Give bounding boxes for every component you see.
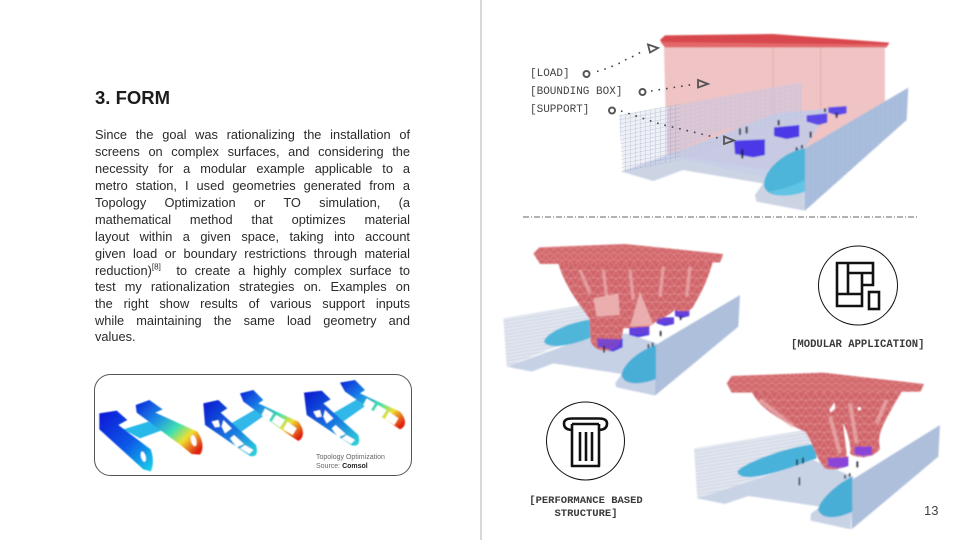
back wall [694,429,810,498]
label: bounding box: [BOUNDING BOX] [530,86,622,98]
body text: given load or boundary restrictions through material [95,246,410,261]
far train [544,319,592,346]
horizontal divider [523,216,918,218]
body text: screens on complex surfaces, and considering the [95,144,410,159]
funnel openings [829,403,835,412]
body text: necessity for a modular example applicable to a [95,161,410,176]
page number: 13 [924,503,938,518]
body text: metro station, I used geometries generated from a [95,178,410,193]
diagram: optimization result one [503,244,740,396]
bounding box volume [664,47,885,170]
body text: Topology Optimization or TO simulation, (a [95,195,410,210]
label: performance based structure: [PERFORMANCE BASED [529,495,643,507]
image caption: Source: Comsol [316,463,368,470]
solid bracket [99,400,203,471]
people [740,108,837,158]
lattice bracket two [304,380,405,446]
left wall grid overlay [619,104,680,172]
faint wall grid continuation [680,82,802,160]
floor [697,460,853,529]
red topology funnel [752,392,902,469]
body text: values. [95,329,136,344]
vertical divider [480,0,482,540]
mesh highlights [760,400,887,453]
body text: the right show results of various support inputs [95,296,410,311]
red roof [727,373,924,393]
body text: mathematical method that optimizes material [95,212,410,227]
image caption [316,454,385,470]
far train [737,444,817,477]
body text: Since the goal was rationalizing the installation of [95,127,410,142]
right wall [655,295,740,396]
body text [95,127,410,344]
body text: layout within a given space, taking into account [95,229,410,244]
lattice bracket one [203,390,303,456]
supports seen through funnel [597,311,689,350]
body text: test my rationalization strategies on. Examples on [95,279,410,294]
callout: load marker and arrow [584,44,658,77]
train [764,148,805,196]
red topology funnel [558,262,713,351]
red roof [533,244,723,264]
renders [99,380,405,471]
floor [622,108,830,211]
pale funnel facets [593,292,653,327]
people [604,316,681,353]
near train [622,345,656,383]
image panel: topology optimization [94,374,412,476]
image caption: Topology Optimization [316,454,385,461]
supports [827,457,848,469]
back wall [619,107,667,172]
title: 3. FORM [95,87,170,108]
body text: reduction)[8] to create a highly complex surface to [95,263,410,278]
load roof [660,34,889,47]
callout: bounding box marker and arrow [640,80,708,95]
floor [507,333,657,396]
right wall [852,425,940,529]
label: performance based structure [529,495,643,520]
back wall [503,304,590,367]
icon: modular floor plan [818,246,898,325]
mesh highlights [580,267,690,300]
diagram: bounding box, load and supports [619,34,908,211]
right wall lines overlay [805,88,908,211]
panel frame [94,374,412,476]
callout: support marker and arrow [609,108,734,144]
people [797,458,857,485]
support blocks [734,139,765,157]
icon: column capital [546,402,624,480]
near train [818,477,852,517]
right wall [805,88,908,211]
supports [596,337,623,352]
label: support: [SUPPORT] [530,104,589,116]
supports seen through funnel [828,447,872,468]
body text: while maintaining the same load geometry and [95,313,410,328]
label: performance based structure: STRUCTURE] [554,508,618,520]
diagram: optimization result two [694,373,940,529]
label: load: [LOAD] [530,68,570,80]
label: modular application: [MODULAR APPLICATION] [791,339,925,351]
